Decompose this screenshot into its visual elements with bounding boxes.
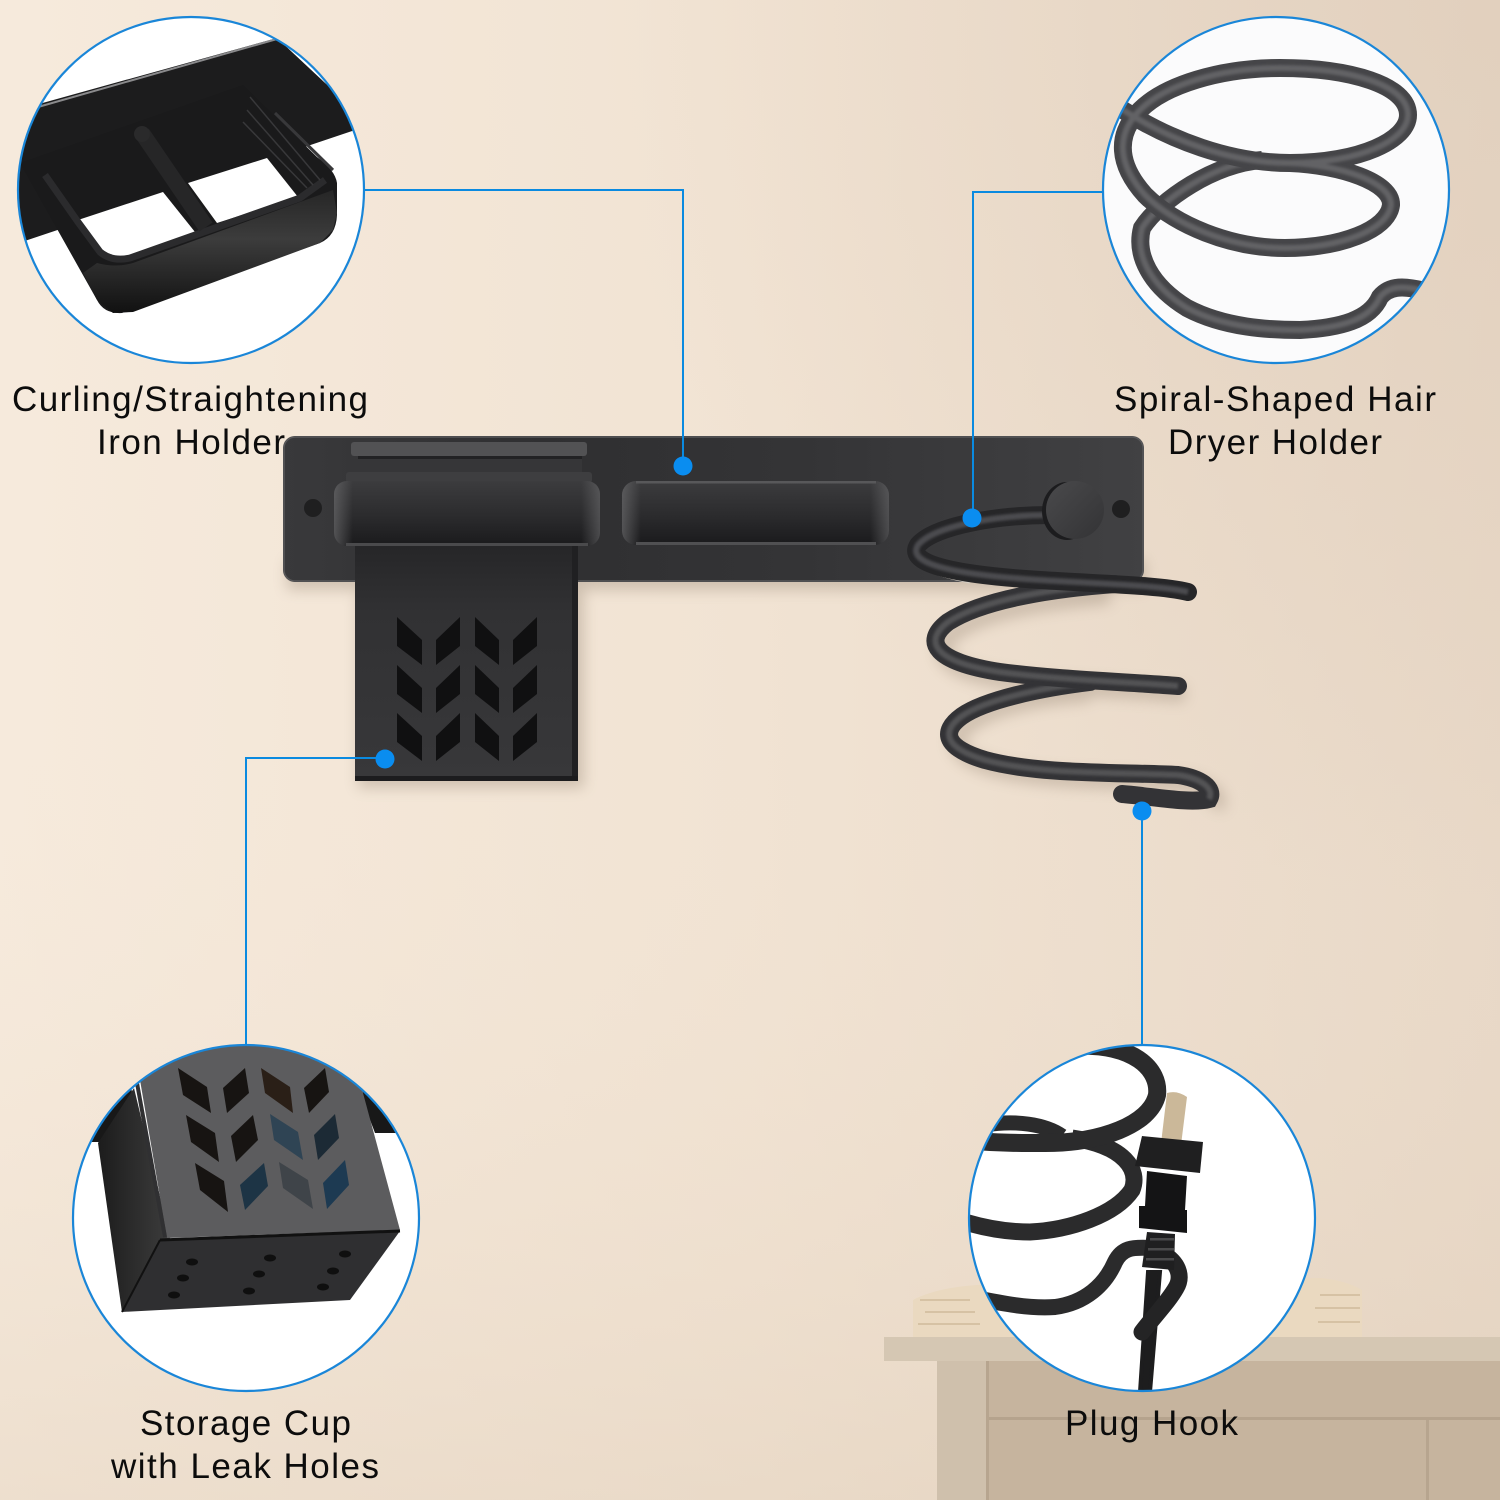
back plate with screw holes	[283, 436, 1144, 582]
label: curling/straightening iron holder: Curling/Straightening	[12, 380, 368, 419]
leader lines and dots	[246, 190, 1152, 1045]
product shadow	[287, 560, 1217, 808]
label: curling/straightening iron holder	[12, 380, 368, 462]
iron holder clip	[622, 481, 889, 545]
detail circle: plug hook	[965, 1045, 1315, 1392]
detail circle: spiral holder	[1103, 17, 1449, 363]
chevron drainage slots	[397, 617, 537, 761]
main product: wall-mounted holder	[283, 436, 1217, 808]
bottom drain holes	[168, 1250, 351, 1298]
leader: plug hook	[1132, 802, 1152, 1045]
background cabinet and cushion	[884, 1278, 1500, 1500]
leader: iron holder	[365, 190, 692, 476]
diamond leak slots	[178, 1068, 349, 1212]
spiral hair dryer holder	[915, 515, 1210, 801]
detail circle: iron holder	[10, 17, 370, 363]
label: spiral-shaped hair dryer holder: Spiral-Shaped Hair	[1114, 380, 1436, 419]
plug	[1135, 1092, 1203, 1270]
label: storage cup: with Leak Holes	[110, 1447, 379, 1486]
label: storage cup: Storage Cup	[140, 1404, 351, 1443]
label: spiral-shaped hair dryer holder: Dryer Holder	[1168, 423, 1382, 462]
spiral mounting knob	[1042, 481, 1104, 540]
label: plug hook: Plug Hook	[1065, 1404, 1238, 1443]
detail circle: storage cup	[73, 1040, 419, 1391]
leader: dryer holder	[962, 192, 1102, 528]
cup strap	[334, 472, 600, 546]
leader: storage cup	[246, 750, 394, 1045]
label: curling/straightening iron holder: Iron Holder	[97, 423, 285, 462]
label: spiral-shaped hair dryer holder	[1114, 380, 1436, 462]
label: storage cup	[110, 1404, 379, 1486]
storage cup	[334, 442, 600, 781]
